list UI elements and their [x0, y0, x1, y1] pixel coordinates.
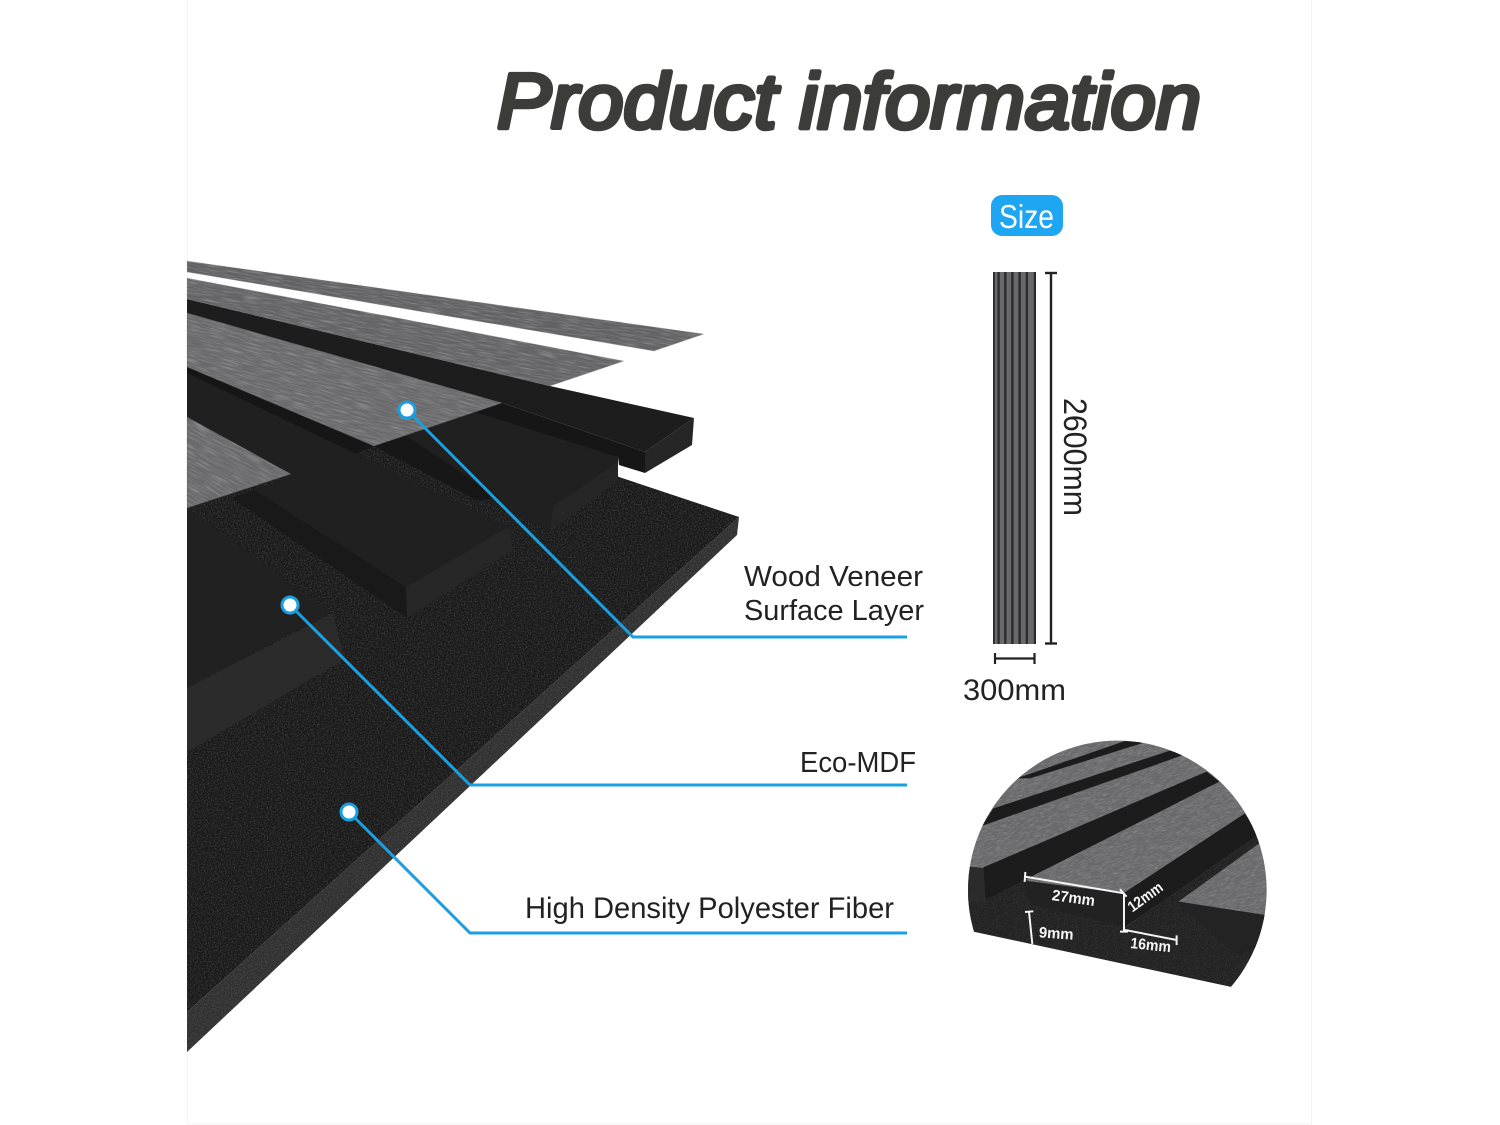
panel: full panel elevation [993, 272, 1036, 644]
dimension: 300mm: 300mm [963, 674, 1066, 707]
panel: circular close-up [968, 740, 1267, 987]
dimension labels: 9mm [1038, 924, 1074, 944]
second veneer strip [167, 196, 644, 468]
dimension: height arrow [1045, 272, 1057, 644]
title: Product information [497, 57, 1201, 145]
dimension labels: 12mm [1125, 879, 1166, 916]
panel: exploded layer diagram [149, 181, 739, 1052]
label: wood veneer surface layer: Surface Layer [744, 595, 924, 627]
size badge: Size [999, 198, 1054, 235]
left MDF slat [187, 508, 343, 752]
dimension labels: 16mm [1130, 935, 1172, 956]
back MDF slat with veneer strip [187, 299, 694, 532]
slat grooves [982, 741, 1258, 927]
callout: polyester fiber pointer [341, 804, 907, 933]
third veneer strip [154, 234, 535, 525]
veneer surface [968, 740, 1267, 920]
slat end faces [963, 866, 1270, 954]
dimension lines [1025, 872, 1177, 945]
top veneer strip [173, 181, 718, 431]
dimension labels [1040, 884, 1170, 952]
label: eco-MDF: Eco-MDF [800, 747, 916, 779]
dimension: width arrow [995, 653, 1035, 664]
fourth veneer strip [149, 374, 329, 551]
polyester fiber layer [968, 836, 1264, 987]
label: high density polyester fiber: High Density Polyester Fiber [525, 892, 894, 925]
front MDF slat [187, 373, 513, 618]
dimension labels: 27mm [1051, 887, 1096, 910]
label: wood veneer surface layer [744, 561, 924, 627]
label: wood veneer surface layer: Wood Veneer [744, 561, 923, 593]
dimension: 2600mm: 2600mm [1057, 398, 1093, 516]
callout: wood veneer pointer [399, 402, 907, 637]
high density polyester fiber base [187, 313, 739, 1052]
callout: eco-MDF pointer [282, 597, 907, 785]
